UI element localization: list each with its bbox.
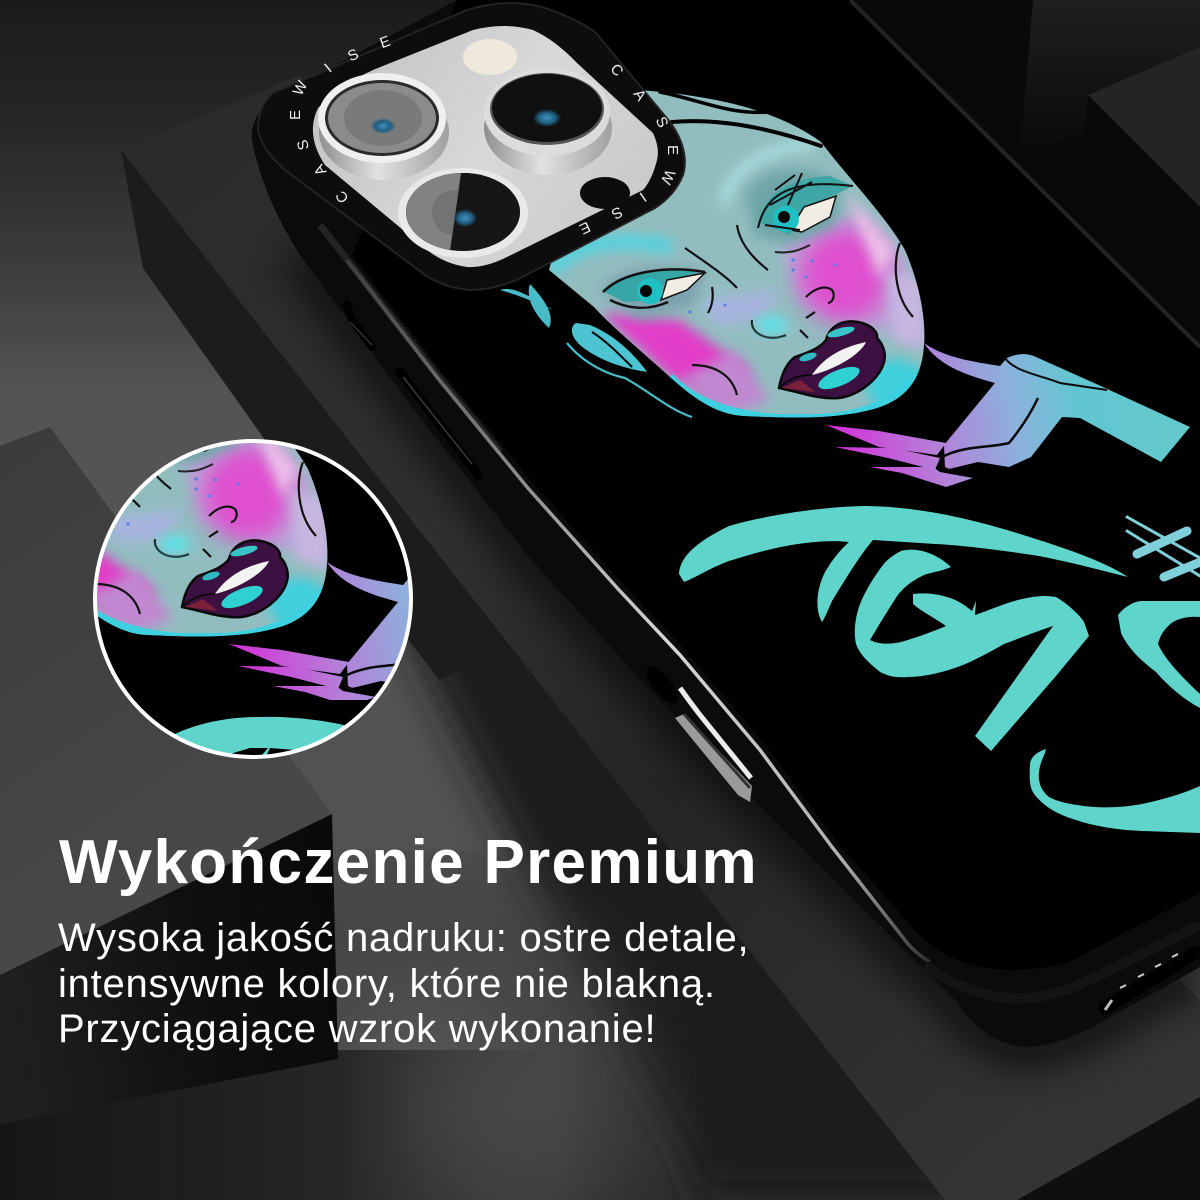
description text: intensywne kolory, które nie blakną. xyxy=(58,962,716,1006)
right eye xyxy=(758,173,853,253)
bottom lens xyxy=(398,168,528,258)
nose highlight xyxy=(756,316,788,334)
left cube xyxy=(0,427,338,1124)
facial lines xyxy=(685,225,913,395)
brand ring text: A xyxy=(311,161,330,178)
brand ring text: E xyxy=(577,218,593,237)
speaker slot xyxy=(1105,952,1197,1010)
lower floor shade xyxy=(0,1050,560,1200)
brand ring text: C xyxy=(332,187,352,206)
mute switch xyxy=(347,305,372,347)
brand ring text: S xyxy=(608,203,625,222)
lidar sensor xyxy=(580,177,630,209)
title: Wykończenie Premium xyxy=(59,828,758,897)
power button xyxy=(641,662,752,802)
volume button xyxy=(400,372,478,475)
description text: Wysoka jakość nadruku: ostre detale, xyxy=(58,916,749,960)
brand ring text: C xyxy=(607,61,627,80)
left lens xyxy=(318,73,449,180)
brand ring text: W xyxy=(656,167,678,188)
edge highlight xyxy=(347,260,930,962)
brand ring text: I xyxy=(321,61,335,76)
left eye xyxy=(603,269,705,308)
hand xyxy=(826,343,1190,487)
camera glass xyxy=(313,26,658,267)
phone screen xyxy=(352,0,1200,970)
brand ring text: E xyxy=(378,33,393,52)
floor light glow xyxy=(150,850,750,1200)
camera island xyxy=(258,3,685,290)
brand ring text: E xyxy=(287,110,304,120)
brand ring text xyxy=(287,33,681,237)
brand ring text: A xyxy=(630,86,649,104)
brand ring text: E xyxy=(664,145,681,155)
phone case xyxy=(252,0,1200,1047)
brand ring text: S xyxy=(294,138,313,152)
brand ring text: S xyxy=(652,114,671,130)
background blocks upper right xyxy=(850,0,1200,350)
brand ring text: S xyxy=(345,46,361,65)
face skin xyxy=(540,80,940,430)
flash xyxy=(463,39,517,75)
left hair and ear xyxy=(500,284,692,417)
freckles xyxy=(688,258,837,314)
description text xyxy=(58,916,749,1051)
printed hash mark xyxy=(1127,517,1200,577)
brand ring text: W xyxy=(290,77,312,98)
phone shadow xyxy=(300,255,1200,1047)
right lens xyxy=(484,68,612,175)
description text: Przyciągające wzrok wykonanie! xyxy=(58,1007,656,1051)
block side face xyxy=(121,150,1000,1200)
dark cube lower right xyxy=(1017,1097,1200,1200)
brand ring text: I xyxy=(636,188,649,205)
fingers xyxy=(826,425,973,487)
printed lettering xyxy=(679,506,1200,833)
zoom circle xyxy=(93,439,413,759)
printed illustration: face xyxy=(500,80,1200,833)
hair strands xyxy=(660,86,821,146)
lips xyxy=(779,321,885,398)
